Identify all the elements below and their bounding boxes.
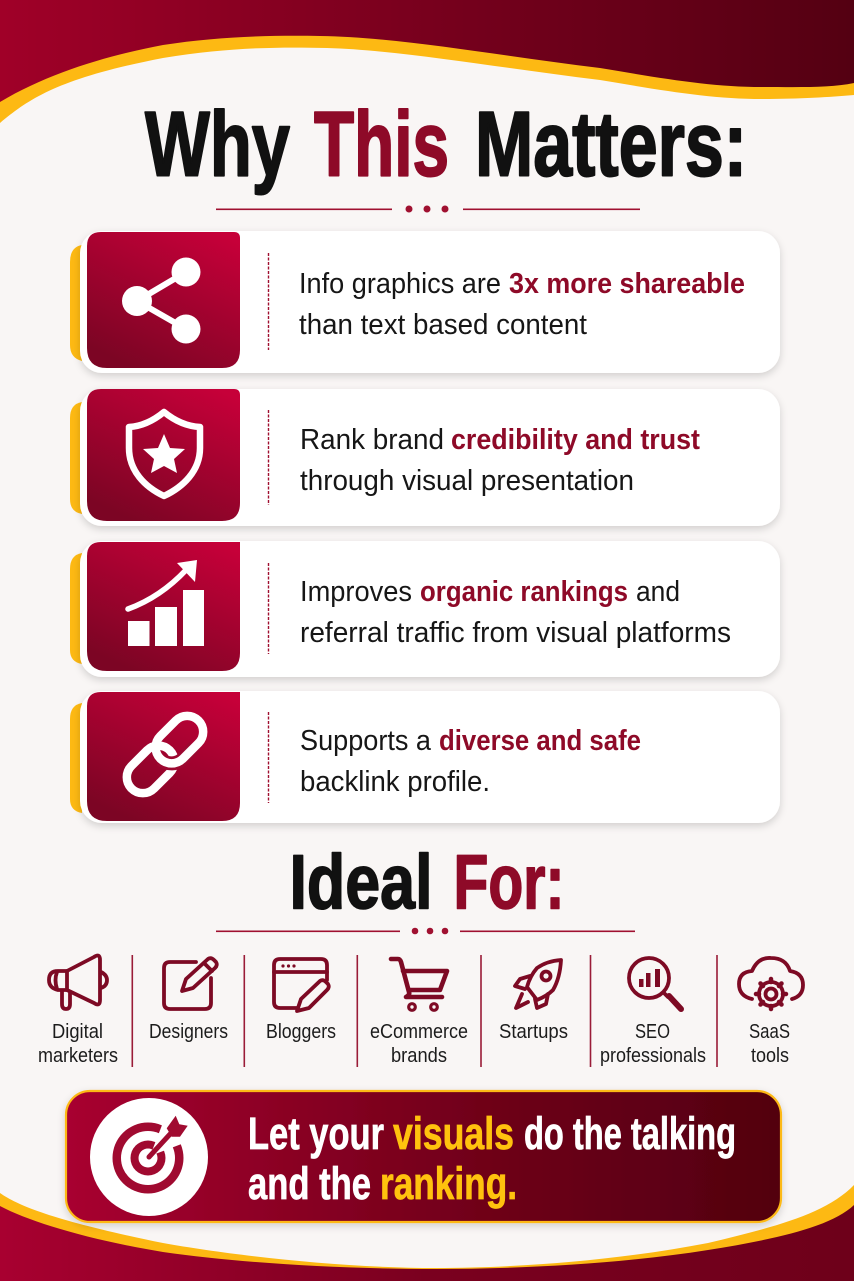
text: shareable: Info graphics are xyxy=(299,268,501,300)
audience: designers xyxy=(149,958,228,1043)
callout text: do the talking xyxy=(524,1108,736,1159)
top wave header xyxy=(0,0,854,123)
text: rankings: and xyxy=(636,576,680,608)
text: rankings xyxy=(300,576,731,649)
text: credibility: through visual presentation xyxy=(300,465,634,497)
icon: growth chart xyxy=(128,560,204,646)
title: Why This Matters: This xyxy=(314,94,449,196)
text: shareable: 3x more shareable xyxy=(509,268,745,300)
audience: SaaS tools: SaaS xyxy=(749,1021,790,1043)
icon: share xyxy=(122,258,200,344)
text: rankings: referral traffic from visual platforms xyxy=(300,617,731,649)
icon: shield with star xyxy=(129,412,200,496)
callout text: visuals xyxy=(393,1108,514,1159)
title: Why This Matters xyxy=(145,94,747,196)
audience: SEO professionals xyxy=(600,958,706,1067)
audience: eCommerce brands xyxy=(370,959,468,1067)
title: Why This Matters: Why xyxy=(145,94,290,196)
callout text: ranking. xyxy=(380,1158,517,1209)
heading: Ideal For xyxy=(290,840,564,926)
text: shareable xyxy=(299,268,745,341)
text: backlinks: backlink profile. xyxy=(300,766,490,798)
callout banner xyxy=(66,1091,781,1222)
audience: designers: Designers xyxy=(149,1021,228,1043)
audience: bloggers xyxy=(266,959,336,1043)
text: shareable: than text based content xyxy=(299,309,587,341)
text: rankings: Improves xyxy=(300,576,412,608)
audience: bloggers: Bloggers xyxy=(266,1021,336,1043)
icon: target with arrow xyxy=(90,1098,208,1216)
callout text xyxy=(248,1108,736,1209)
text: backlinks: diverse and safe xyxy=(439,725,641,757)
panel: rankings xyxy=(70,541,780,677)
text: rankings: organic rankings xyxy=(420,576,628,608)
audience: eCommerce brands: eCommerce xyxy=(370,1021,468,1043)
text: credibility xyxy=(300,424,700,497)
heading divider xyxy=(216,928,635,934)
text: backlinks: Supports a xyxy=(300,725,432,757)
panel: credibility xyxy=(70,389,780,526)
text: credibility: Rank brand xyxy=(300,424,444,456)
audience: digital marketers xyxy=(38,956,118,1067)
callout text: and the xyxy=(248,1158,371,1209)
audience: eCommerce brands: brands xyxy=(391,1045,447,1067)
text: backlinks xyxy=(300,725,641,798)
panel: backlinks xyxy=(70,691,780,823)
audience: SEO professionals: professionals xyxy=(600,1045,706,1067)
audience separators xyxy=(132,955,718,1067)
audience: SEO professionals: SEO xyxy=(635,1021,670,1043)
heading: Ideal For: For: xyxy=(454,840,564,926)
heading: Ideal For: Ideal xyxy=(290,840,432,926)
text: credibility: credibility and trust xyxy=(451,424,700,456)
audience: startups: Startups xyxy=(499,1021,568,1043)
audience: SaaS tools xyxy=(739,958,803,1067)
audience: startups xyxy=(499,960,568,1043)
audience: digital marketers: marketers xyxy=(38,1045,118,1067)
panel: shareable xyxy=(70,231,780,373)
audience: digital marketers: Digital xyxy=(52,1021,103,1043)
bottom wave footer xyxy=(0,1185,854,1281)
callout text: Let your xyxy=(248,1108,384,1159)
icon: chain link xyxy=(120,709,210,800)
audience: SaaS tools: tools xyxy=(751,1045,789,1067)
title divider xyxy=(216,206,640,212)
title: Why This Matters: Matters: xyxy=(475,94,747,196)
